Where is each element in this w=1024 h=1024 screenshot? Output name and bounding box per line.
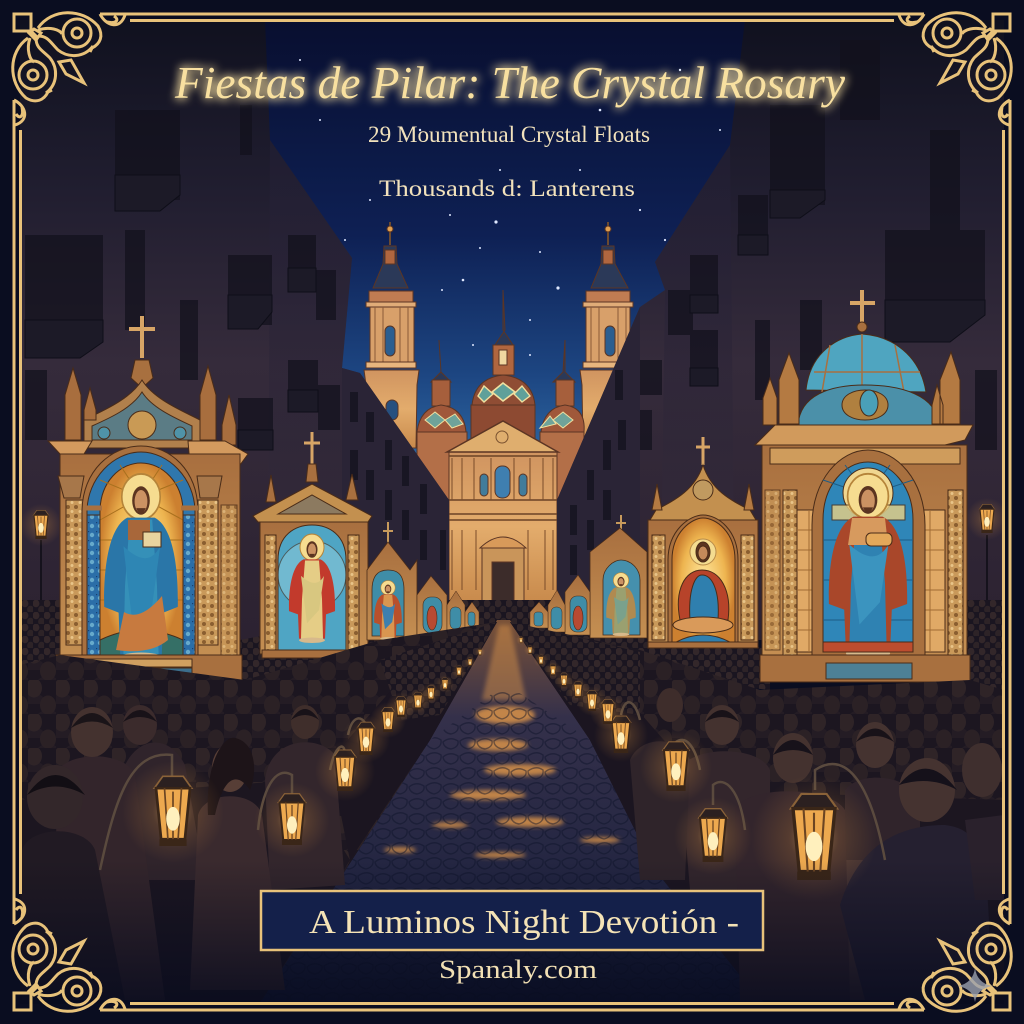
bottom darkening vignette — [0, 860, 1024, 1024]
cross — [129, 316, 155, 358]
figure: woman with lantern — [190, 738, 285, 990]
lantern staffs — [100, 718, 366, 870]
base — [56, 655, 242, 681]
lantern staffs — [621, 702, 885, 860]
float: third left — [367, 522, 417, 640]
right buildings — [557, 20, 1004, 640]
procession figures: right side — [516, 635, 1004, 1000]
dome — [806, 334, 926, 392]
body — [60, 454, 240, 659]
corner ornament: bottom right — [899, 899, 1011, 1011]
figure: right edge — [962, 743, 1004, 900]
corner ornament: bottom left — [13, 899, 125, 1011]
arch window — [812, 450, 925, 655]
caption banner: A Luminos Night Devotión - — [309, 904, 739, 941]
figure — [265, 705, 345, 890]
float: third right — [590, 515, 647, 638]
float: large left stained glass — [48, 316, 248, 681]
cobblestone path — [255, 620, 770, 1010]
float: second left — [253, 432, 372, 658]
cornice — [48, 441, 248, 465]
crowd: left mass — [20, 622, 497, 1000]
figure — [735, 733, 850, 1000]
lanterns — [122, 647, 485, 863]
saint: blue robe with bread — [829, 474, 907, 658]
left bell tower — [364, 222, 419, 448]
cross — [850, 290, 875, 330]
website credit: Spanaly.com — [439, 955, 597, 984]
caption banner — [261, 891, 763, 950]
float: fifth right — [530, 590, 565, 632]
spires — [763, 352, 960, 425]
figure — [680, 705, 770, 890]
figure — [55, 707, 165, 1000]
title: Fiestas de Pilar: The Crystal Rosary — [174, 57, 846, 108]
subtitle: floats: 29 Moumentual Crystal Floats — [368, 122, 650, 147]
figure: foreground man — [22, 765, 125, 1000]
small left dome — [417, 340, 467, 502]
lanterns — [516, 635, 877, 901]
spires — [65, 366, 236, 445]
saint: blue robe holding book — [104, 474, 178, 662]
street lamp: left — [20, 504, 62, 610]
body — [762, 445, 967, 657]
procession figures: left side — [22, 647, 485, 1000]
float: fourth right — [565, 575, 590, 635]
gable with mosaic — [84, 380, 200, 448]
float: fifth left — [447, 591, 479, 632]
cornice — [755, 425, 973, 445]
night sky with stars — [250, 0, 770, 470]
sparkle mark — [958, 968, 992, 1002]
small right dome — [540, 340, 584, 502]
arch window — [82, 446, 198, 660]
right bell tower — [580, 222, 633, 448]
left buildings — [20, 20, 449, 640]
float: large right domed — [755, 290, 973, 682]
subtitle: lanterns: Thousands d: Lanterens — [379, 176, 635, 201]
figure — [845, 722, 920, 860]
hooded figure — [835, 794, 905, 1000]
street lamp: right — [966, 498, 1008, 605]
basilica — [364, 222, 633, 602]
crowd: distant background heads — [20, 600, 1004, 690]
float: second right — [648, 437, 758, 648]
base — [760, 655, 970, 682]
crowd: right mass — [510, 622, 1004, 1000]
figure: foreground man — [840, 758, 990, 1000]
corner ornament: top right — [899, 13, 1011, 125]
central dome — [471, 290, 535, 445]
figure — [630, 688, 690, 880]
figure — [123, 705, 205, 880]
corner ornament: top left — [13, 13, 125, 125]
float: fourth left — [417, 576, 447, 637]
facade — [447, 421, 558, 602]
